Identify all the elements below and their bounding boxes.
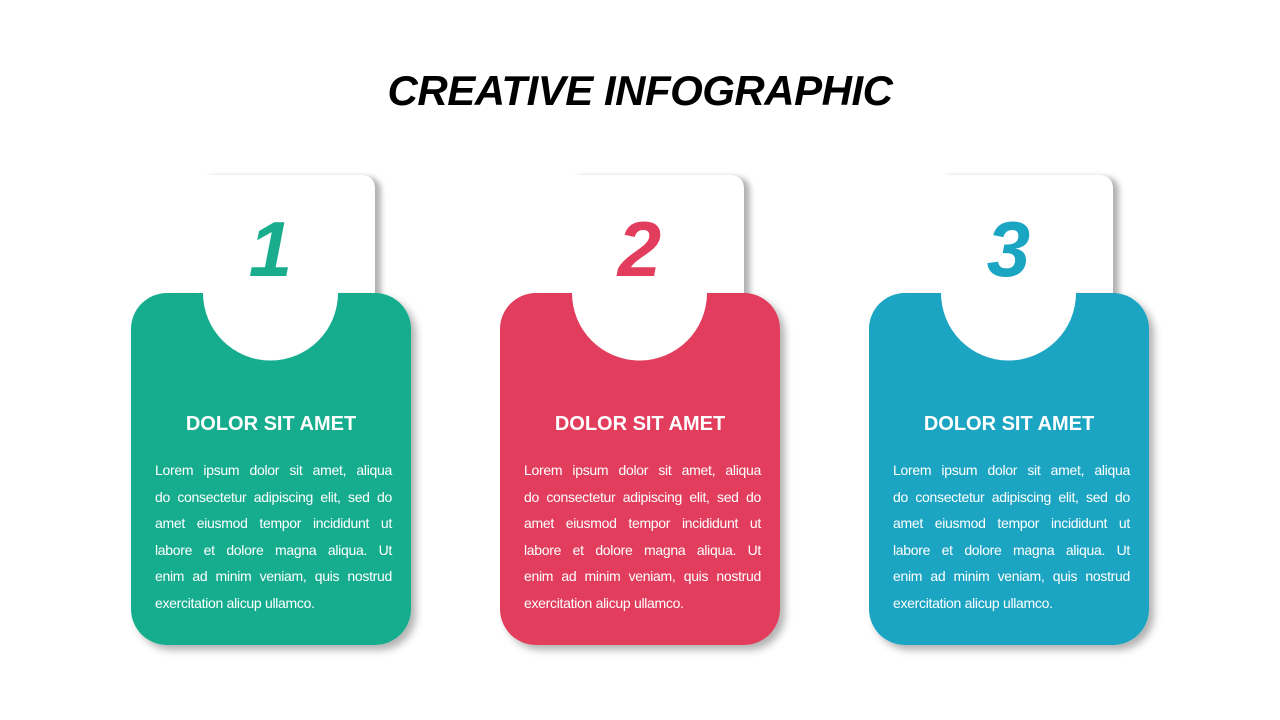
text block: do consectetur adipiscing elit, sed do (893, 488, 1130, 504)
text block (893, 462, 1130, 611)
text block: Lorem ipsum dolor sit amet, aliqua (893, 462, 1130, 478)
heading: DOLOR SIT AMET (186, 413, 356, 435)
heading: DOLOR SIT AMET (924, 413, 1094, 435)
number 3: 3 (987, 205, 1030, 293)
text block (524, 462, 762, 611)
text block (155, 462, 392, 611)
text block: enim ad minim veniam, quis nostrud (893, 568, 1130, 584)
panel: card 3 (869, 174, 1158, 654)
heading: DOLOR SIT AMET (555, 413, 725, 435)
text block: enim ad minim veniam, quis nostrud (155, 568, 392, 584)
text block: labore et dolore magna aliqua. Ut (893, 542, 1130, 558)
title: CREATIVE INFOGRAPHIC (388, 67, 892, 114)
text block: amet eiusmod tempor incididunt ut (524, 515, 761, 531)
number 2: 2 (618, 205, 661, 293)
panel: card 2 (500, 174, 790, 654)
text block: do consectetur adipiscing elit, sed do (524, 488, 761, 504)
panel: card 1 (131, 174, 420, 654)
text block: amet eiusmod tempor incididunt ut (155, 515, 392, 531)
text block: enim ad minim veniam, quis nostrud (524, 568, 761, 584)
text block: Lorem ipsum dolor sit amet, aliqua (155, 462, 392, 478)
text block: Lorem ipsum dolor sit amet, aliqua (524, 462, 761, 478)
number 1: 1 (249, 205, 292, 293)
text block: exercitation alicup ullamco. (155, 594, 315, 610)
text block: labore et dolore magna aliqua. Ut (524, 542, 761, 558)
text block: amet eiusmod tempor incididunt ut (893, 515, 1130, 531)
text block: exercitation alicup ullamco. (893, 594, 1053, 610)
text block: do consectetur adipiscing elit, sed do (155, 488, 392, 504)
text block: labore et dolore magna aliqua. Ut (155, 542, 392, 558)
text block: exercitation alicup ullamco. (524, 594, 684, 610)
